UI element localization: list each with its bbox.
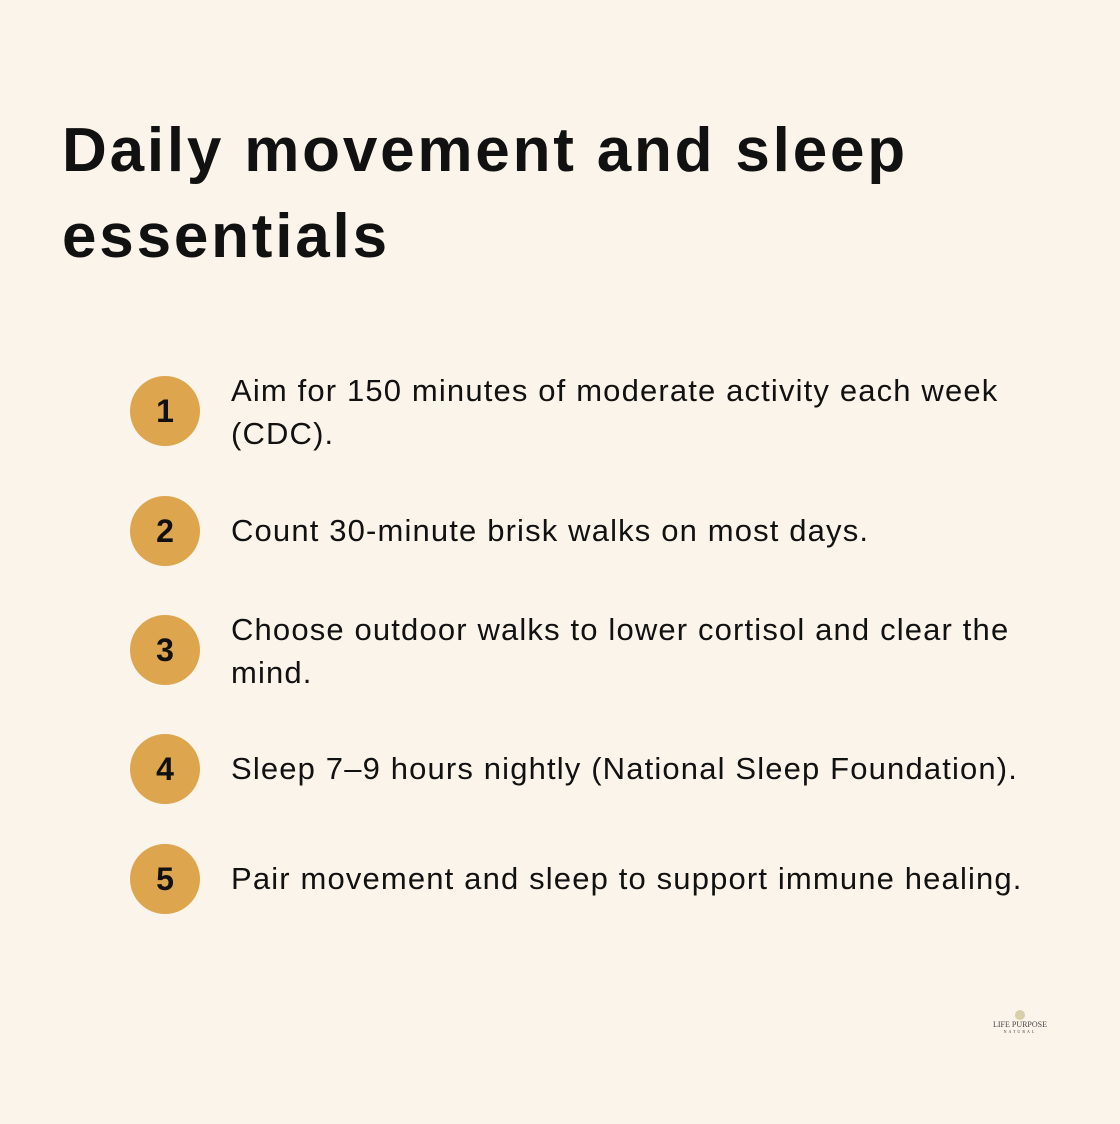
number badge 3: 3 xyxy=(156,632,174,668)
number badge 1: 1 xyxy=(156,393,174,429)
number badge 2: 2 xyxy=(156,513,174,549)
item 2 xyxy=(130,496,869,566)
title xyxy=(62,116,908,271)
text 2: Count 30-minute brisk walks on most days. xyxy=(231,513,869,548)
item 1 xyxy=(130,373,998,451)
text 1: Aim for 150 minutes of moderate activity each week xyxy=(231,373,998,408)
text 3 xyxy=(231,612,1009,690)
number badge 1 xyxy=(130,376,200,446)
title: essentials xyxy=(62,202,390,271)
text 1: (CDC). xyxy=(231,416,334,451)
logo: LIFE PURPOSE xyxy=(993,1020,1047,1029)
number badge 3 xyxy=(130,615,200,685)
item 4 xyxy=(130,734,1018,804)
logo: NATURAL xyxy=(1004,1029,1036,1034)
text 3: Choose outdoor walks to lower cortisol and clear the xyxy=(231,612,1009,647)
logo xyxy=(993,1010,1047,1034)
text 4: Sleep 7–9 hours nightly (National Sleep Foundation). xyxy=(231,751,1018,786)
item 3 xyxy=(130,612,1009,690)
number badge 5: 5 xyxy=(156,861,174,897)
number badge 4: 4 xyxy=(156,751,174,787)
text 3: mind. xyxy=(231,655,313,690)
number badge 2 xyxy=(130,496,200,566)
text 1 xyxy=(231,373,998,451)
title: Daily movement and sleep xyxy=(62,116,908,185)
number badge 4 xyxy=(130,734,200,804)
item 5 xyxy=(130,844,1023,914)
text 5: Pair movement and sleep to support immune healing. xyxy=(231,861,1023,896)
number badge 5 xyxy=(130,844,200,914)
